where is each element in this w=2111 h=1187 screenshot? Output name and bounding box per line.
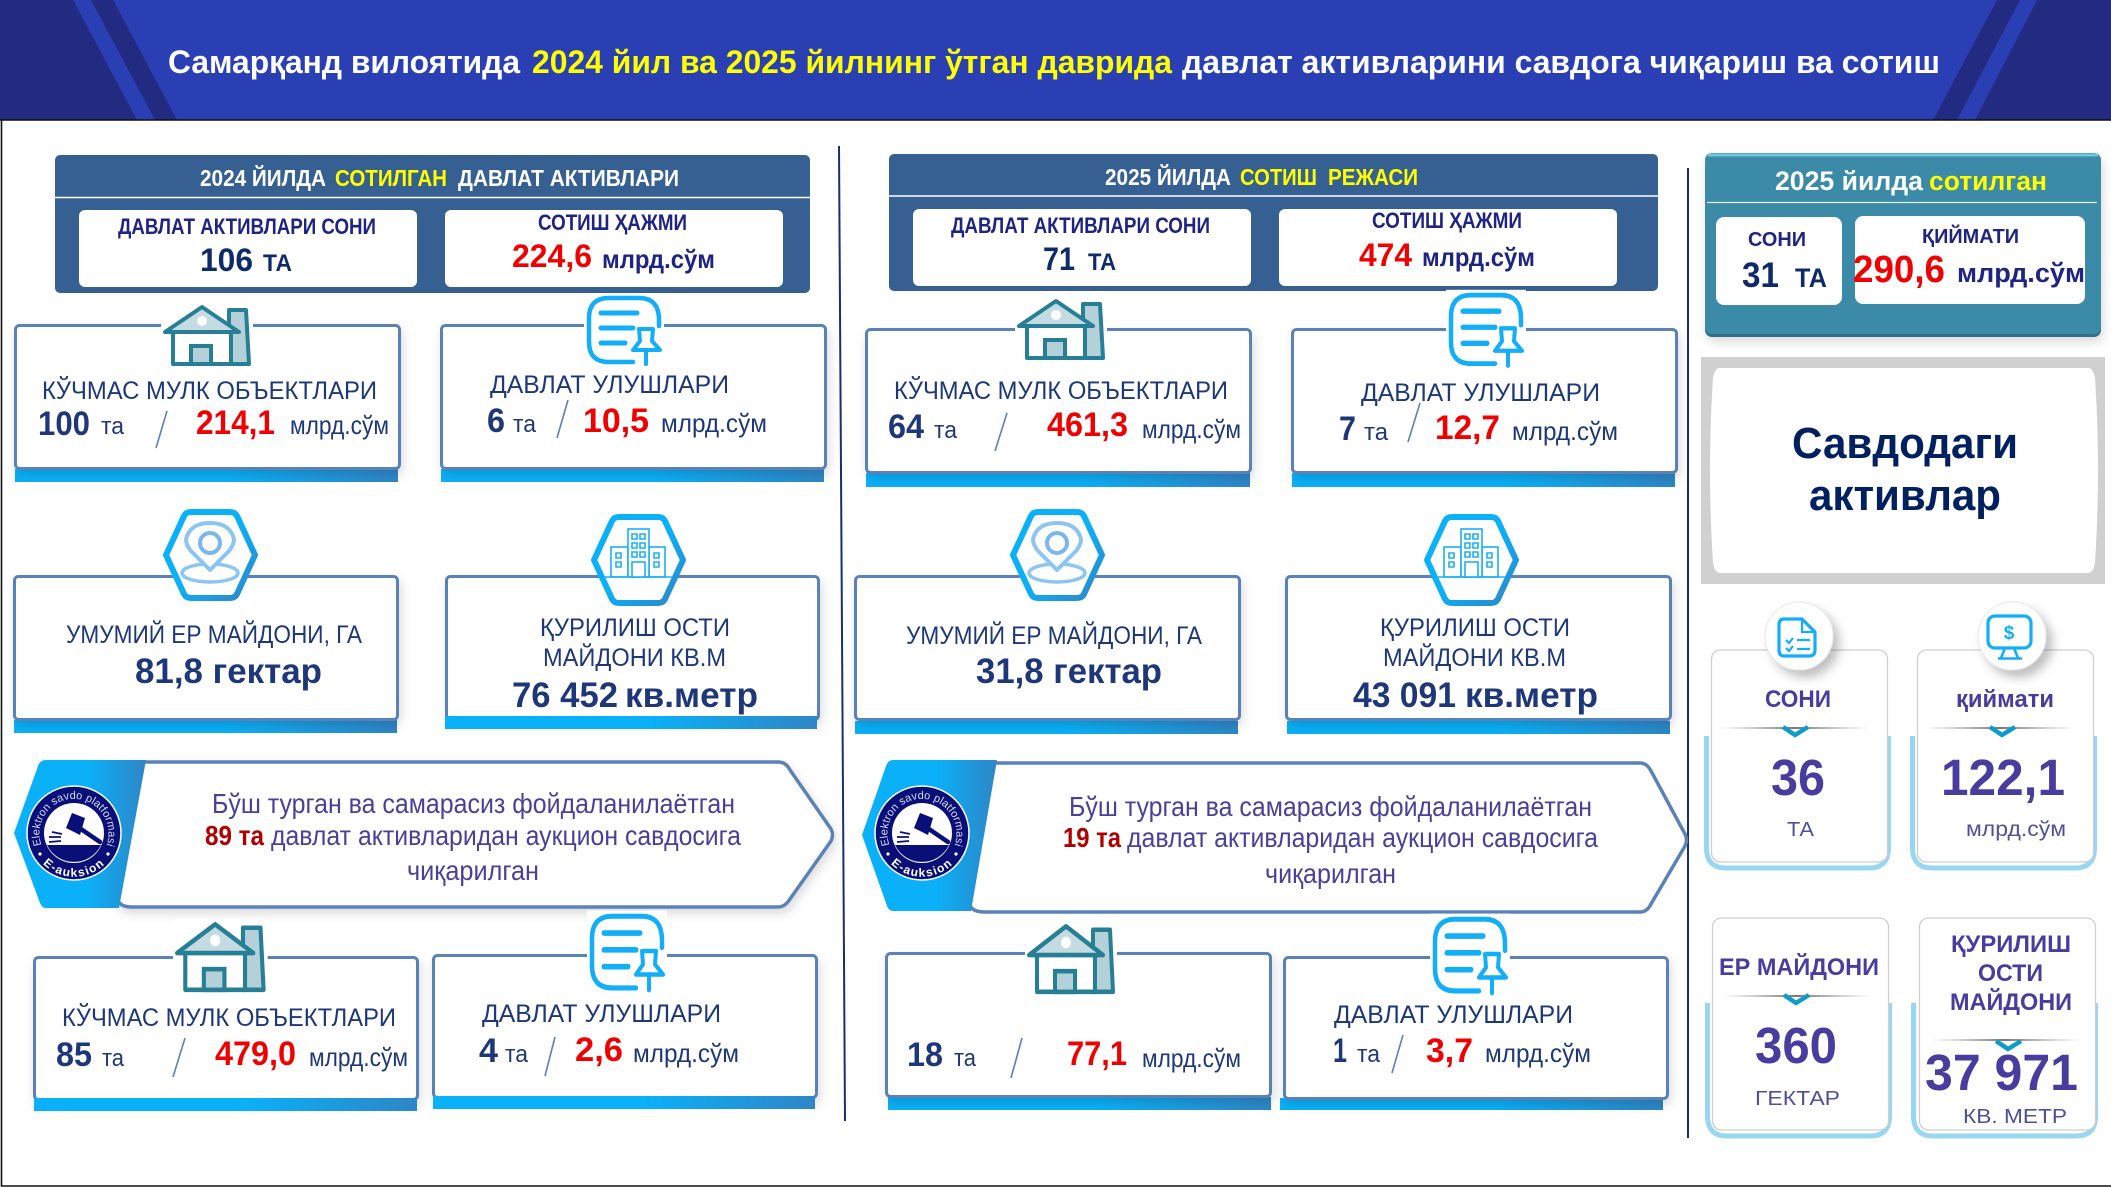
icon: house: [1025, 922, 1117, 995]
label: ДАВЛАТ УЛУШЛАРИ: [1334, 1001, 1573, 1029]
values: 479,0: [215, 1035, 296, 1073]
value: 36: [1771, 749, 1825, 806]
values: 100: [38, 405, 90, 443]
callout text: Бўш турган ва самарасиз фойдаланилаётган: [1069, 791, 1592, 822]
label: ДАВЛАТ УЛУШЛАРИ: [490, 371, 729, 399]
value: 81,8 гектар: [135, 652, 322, 691]
values: та: [513, 411, 537, 438]
values: та: [1364, 419, 1389, 446]
label: КЎЧМАС МУЛК ОБЪЕКТЛАРИ: [42, 375, 377, 405]
callout text: чиқарилган: [1265, 858, 1396, 889]
icon: e-auksion logo: [875, 786, 969, 880]
logo tab: [862, 760, 997, 911]
callout text: 19 та: [1063, 822, 1121, 853]
label: МАЙДОНИ КВ.М: [543, 642, 726, 672]
values: 1: [1333, 1032, 1347, 1070]
values: [1333, 1032, 1591, 1073]
unit: КВ. МЕТР: [1963, 1106, 2067, 1128]
values: 461,3: [1047, 406, 1128, 444]
callout text: давлат активларидан аукцион савдосига: [271, 820, 741, 851]
label: МАЙДОНИ: [1950, 988, 2072, 1016]
values: млрд.сўм: [1142, 414, 1241, 444]
values: 4: [479, 1032, 498, 1070]
values: 77,1: [1067, 1035, 1127, 1073]
value: [1353, 676, 1598, 715]
stat: asset count: [913, 209, 1251, 286]
heading text: Савдодаги: [1792, 419, 2018, 468]
value: 122,1: [1941, 749, 2065, 806]
label: қиймати: [1956, 686, 2054, 713]
panel heading: СОТИЛГАН: [335, 165, 447, 191]
card: auctioned real estate 2024: [34, 920, 418, 1111]
values: млрд.сўм: [1485, 1038, 1591, 1068]
card: auctioned state shares 2025: [1280, 914, 1668, 1110]
card: construction area 2024: [445, 517, 818, 729]
stat: sale volume: СОТИШ ҲАЖМИ: [1372, 208, 1522, 233]
label: ДАВЛАТ УЛУШЛАРИ: [1361, 379, 1600, 407]
title: Самарқанд вилоятида: [168, 44, 520, 80]
values: 12,7: [1435, 409, 1500, 447]
value: 76 452: [512, 676, 618, 715]
icon: document with pin: [584, 293, 664, 367]
values: млрд.сўм: [661, 408, 767, 438]
stat: sale volume: [445, 210, 783, 287]
values: 6: [487, 402, 505, 440]
card: auctioned state shares 2024: [433, 911, 816, 1109]
heading text: [1792, 419, 2018, 520]
values: млрд.сўм: [1512, 416, 1618, 446]
icon: document with pin: [587, 911, 667, 994]
values: та: [505, 1041, 529, 1068]
stat: asset count: ТА: [1088, 249, 1116, 276]
panel: assets on sale heading: [1701, 357, 2105, 584]
title: 2024 йил ва 2025 йилнинг ўтган даврида: [532, 44, 1172, 80]
panel: 2025 sale plan summary: [889, 154, 1658, 291]
label: ОСТИ: [1978, 960, 2043, 987]
icon: document with pin: [1430, 914, 1510, 997]
values: млрд.сўм: [633, 1038, 739, 1068]
stat: asset count: 71: [1043, 241, 1075, 277]
stat: count: СОНИ: [1748, 229, 1806, 251]
stat: value: 290,6: [1853, 249, 1945, 291]
values: та: [1357, 1041, 1381, 1068]
card: construction area on sale: [1914, 918, 2096, 1136]
values: та: [101, 413, 125, 440]
value: 31,8 гектар: [976, 652, 1162, 691]
label: ЕР МАЙДОНИ: [1719, 953, 1879, 981]
panel heading: РЕЖАСИ: [1328, 164, 1418, 190]
icon: map pin: [1013, 512, 1102, 598]
stat: value: млрд.сўм: [1957, 258, 2085, 288]
values: [56, 1035, 408, 1077]
panel heading: [200, 164, 679, 191]
icon: house: [1015, 297, 1107, 361]
unit: млрд.сўм: [1966, 818, 2066, 841]
callout: auction 2025: [862, 760, 1686, 912]
card: auctioned real estate 2025: [886, 922, 1271, 1110]
values: 85: [56, 1036, 92, 1074]
value: 37 971: [1925, 1044, 2078, 1101]
icon: building: [1427, 517, 1516, 603]
values: [487, 400, 767, 440]
value: 360: [1755, 1017, 1837, 1074]
stat: count: ТА: [1795, 263, 1827, 293]
label: УМУМИЙ ЕР МАЙДОНИ, ГА: [66, 619, 362, 649]
card: state shares 2024: [441, 293, 826, 482]
values: 214,1: [196, 404, 275, 442]
callout text: [1063, 791, 1598, 889]
icon: e-auksion logo: [27, 786, 121, 880]
values: [479, 1031, 739, 1076]
column divider left: [839, 146, 845, 1121]
icon: building: [594, 517, 683, 603]
column divider right: [1687, 168, 1689, 1138]
values: [907, 1035, 1241, 1078]
icon: house: [173, 920, 268, 993]
stat: count: [1716, 217, 1842, 305]
icon: monitor with dollar: $: [2004, 623, 2015, 644]
stat: value: ҚИЙМАТИ: [1922, 224, 2019, 248]
stat: sale volume: СОТИШ ҲАЖМИ: [538, 210, 687, 235]
panel: 2024 sold summary: [55, 155, 810, 293]
stat: sale volume: млрд.сўм: [1422, 242, 1535, 272]
callout: auction 2024: [14, 760, 832, 908]
panel heading: 2024 ЙИЛДА: [200, 164, 326, 191]
icon: house: [161, 303, 253, 367]
callout text: давлат активларидан аукцион савдосига: [1127, 822, 1598, 853]
icon: document with pin: [1446, 290, 1526, 369]
label: [1380, 614, 1570, 672]
panel heading: [1105, 163, 1418, 190]
stat: asset count: ДАВЛАТ АКТИВЛАРИ СОНИ: [951, 213, 1210, 238]
values: 10,5: [583, 402, 649, 440]
label: [1950, 931, 2072, 1016]
label: ҚУРИЛИШ ОСТИ: [1380, 614, 1570, 642]
values: 7: [1339, 410, 1356, 448]
callout text: [205, 788, 741, 886]
icon: map pin: [166, 512, 255, 598]
values: млрд.сўм: [309, 1042, 408, 1072]
value: [512, 676, 758, 715]
panel heading: сотилган: [1929, 166, 2047, 196]
card: real estate 2025: [866, 297, 1250, 487]
title: давлат активларини савдога чиқариш ва сотиш: [1182, 44, 1940, 80]
values: [1339, 403, 1618, 448]
label: ҚУРИЛИШ: [1951, 931, 2071, 958]
stat: asset count: ТА: [263, 250, 292, 277]
card: construction area 2025: [1286, 517, 1670, 734]
panel: sold in 2025: [1705, 153, 2101, 337]
values: та: [102, 1045, 125, 1072]
value: кв.метр: [1465, 676, 1598, 715]
card: state shares 2025: [1292, 290, 1676, 487]
label: КЎЧМАС МУЛК ОБЪЕКТЛАРИ: [62, 1002, 396, 1032]
icon: checklist document: [1765, 602, 1833, 670]
values: млрд.сўм: [1142, 1043, 1241, 1073]
card: total land 2024: [14, 512, 398, 733]
label: [540, 614, 730, 672]
label: ДАВЛАТ УЛУШЛАРИ: [482, 1000, 721, 1028]
stat: asset count: [79, 210, 417, 287]
card: total land 2025: [855, 512, 1240, 734]
values: 64: [888, 408, 924, 446]
values: 2,6: [575, 1031, 623, 1069]
label: ҚУРИЛИШ ОСТИ: [540, 614, 730, 642]
panel heading: 2025 йилда: [1775, 166, 1924, 196]
values: та: [954, 1045, 977, 1072]
callout text: 89 та: [205, 820, 264, 851]
label: УМУМИЙ ЕР МАЙДОНИ, ГА: [906, 620, 1202, 650]
values: млрд.сўм: [290, 410, 389, 440]
card: real estate 2024: [15, 303, 400, 482]
card: value on sale: [1912, 602, 2094, 868]
heading text: активлар: [1809, 471, 2001, 520]
value: 43 091: [1353, 676, 1456, 715]
stat: asset count: ДАВЛАТ АКТИВЛАРИ СОНИ: [118, 214, 376, 239]
unit: ТА: [1787, 819, 1815, 841]
stat: value: [1853, 216, 2085, 304]
label: КЎЧМАС МУЛК ОБЪЕКТЛАРИ: [894, 375, 1228, 405]
card: land on sale: [1708, 918, 1890, 1136]
panel heading: СОТИШ: [1240, 164, 1317, 190]
stat: sale volume: млрд.сўм: [602, 244, 715, 274]
icon: monitor with dollar: [1978, 602, 2046, 670]
values: та: [934, 417, 958, 444]
stat: sale volume: 224,6: [512, 238, 592, 274]
title: [168, 44, 1940, 80]
values: 18: [907, 1036, 943, 1074]
stat: count: 31: [1742, 256, 1779, 295]
panel heading: 2025 ЙИЛДА: [1105, 163, 1231, 190]
stat: asset count: 106: [200, 242, 253, 278]
logo tab: [14, 760, 146, 908]
panel heading: ДАВЛАТ АКТИВЛАРИ: [458, 165, 679, 191]
label: МАЙДОНИ КВ.М: [1383, 642, 1566, 672]
values: [888, 406, 1241, 451]
panel heading: [1775, 166, 2047, 196]
unit: ГЕКТАР: [1755, 1088, 1840, 1110]
callout text: Бўш турган ва самарасиз фойдаланилаётган: [212, 788, 735, 819]
label: СОНИ: [1765, 686, 1831, 713]
stat: sale volume: [1279, 208, 1617, 286]
header banner: [0, 0, 2111, 120]
value: кв.метр: [625, 676, 758, 715]
values: 3,7: [1426, 1032, 1473, 1070]
callout text: чиқарилган: [407, 855, 539, 886]
card: count on sale: [1706, 602, 1888, 868]
stat: sale volume: 474: [1359, 237, 1412, 273]
values: [38, 404, 389, 448]
